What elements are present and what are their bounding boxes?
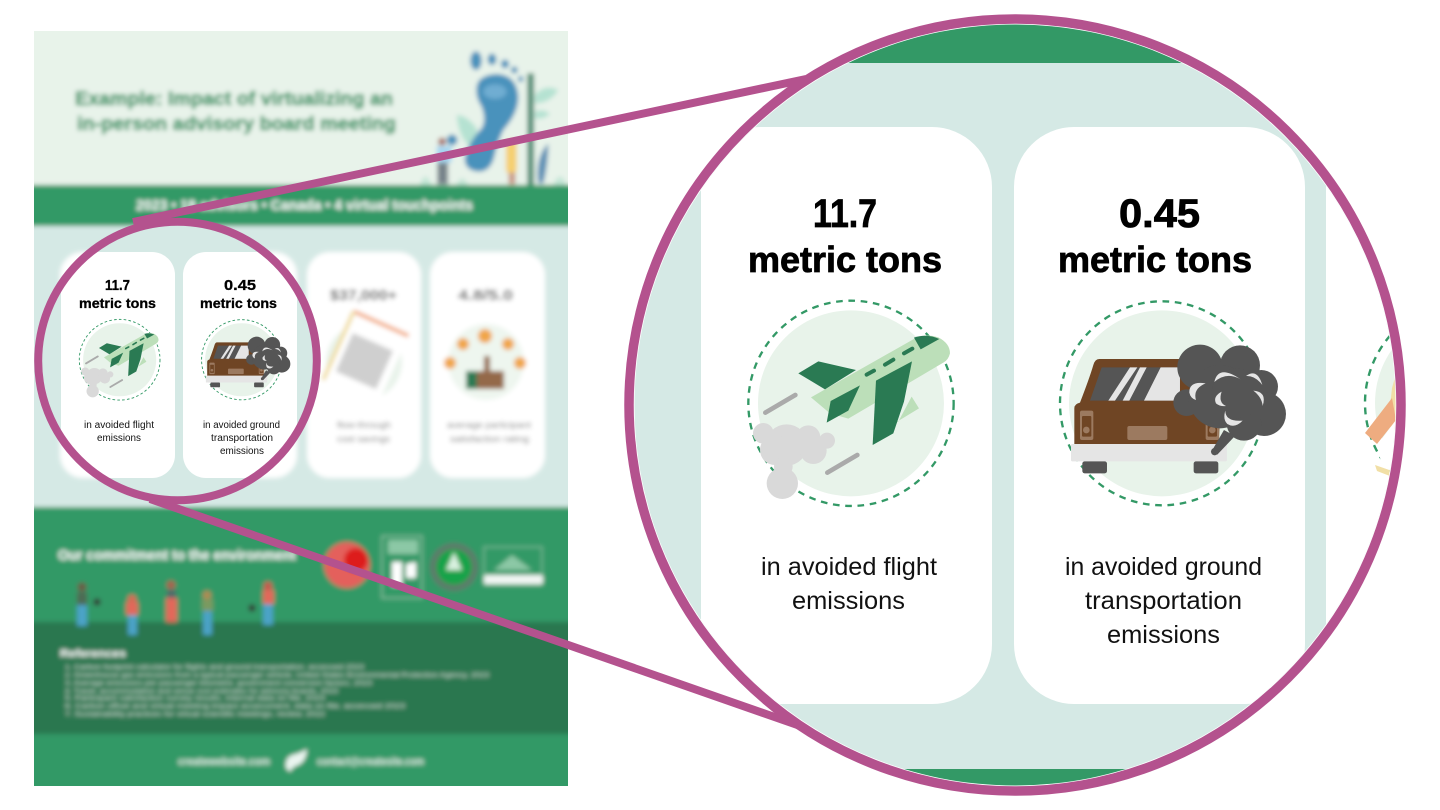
- card: satisfaction rating: satisfaction rating: [450, 434, 529, 445]
- text: in avoided ground transportation emissions: [1066, 557, 1260, 643]
- card: 0.45 metric tons avoided ground emissions: [1014, 127, 1305, 704]
- infographic poster, blurred background: [20, 20, 580, 804]
- text: in avoided ground transportation emissions: emissions: [1107, 621, 1220, 649]
- card: cost savings: flow-through: [337, 420, 391, 431]
- card: 11.7 metric tons avoided flight emissions: [701, 127, 992, 704]
- stat: 11.7 metric tons: 11.7: [813, 192, 877, 236]
- stat: 0.45 metric tons: metric tons: [1058, 239, 1252, 280]
- panel: references: 5. Participant satisfaction survey results, internal data on file, 2023: [65, 695, 326, 702]
- stat: 11.7 metric tons, small: [80, 280, 156, 308]
- text: in avoided ground transportation emissions, small: transportation: [211, 433, 273, 444]
- card: third card partially visible: [1326, 186, 1396, 624]
- title: [75, 89, 396, 135]
- panel: commitment to the environment: Our commitment to the environment: [58, 547, 296, 564]
- card: avoided ground emissions, small: [183, 252, 297, 478]
- text: in avoided ground transportation emissions: in avoided ground: [1065, 553, 1262, 581]
- text: in avoided flight emissions, small: [84, 420, 154, 441]
- stat: 11.7 metric tons: metric tons: [748, 239, 942, 280]
- text: in avoided ground transportation emissions, small: emissions: [220, 446, 264, 457]
- card: cost savings: [307, 252, 421, 478]
- stat: 0.45 metric tons, small: 0.45: [224, 277, 256, 294]
- stat: 0.45 metric tons, small: metric tons: [200, 295, 277, 311]
- card: cost savings: $37,000+: [330, 287, 397, 304]
- icon: car with exhaust smoke: [1060, 301, 1286, 505]
- stat: 11.7 metric tons, small: 11.7: [105, 277, 130, 294]
- text: in avoided ground transportation emissions, small: in avoided ground: [203, 420, 280, 431]
- stat: 11.7 metric tons: [750, 199, 941, 273]
- text: in avoided flight emissions: [762, 557, 937, 609]
- logos: environmental certifications: [324, 536, 543, 598]
- panel: references: 2. Greenhouse gas emissions from a typical passenger vehicle, United States Environmental Protection Agency, 2023: [65, 672, 489, 679]
- panel: header: [20, 20, 580, 185]
- text: in avoided flight emissions: emissions: [792, 587, 905, 615]
- connector line: bottom: [150, 499, 806, 728]
- band: meeting facts: [20, 185, 580, 226]
- cards behind the lens: [60, 252, 297, 478]
- illustration: people planting trees: [77, 580, 274, 635]
- panel: references: [20, 622, 580, 734]
- card: satisfaction rating: 4.8/5.0: [458, 287, 513, 304]
- card: cost savings: cost savings: [337, 434, 390, 445]
- icon: airplane with exhaust cloud: [748, 301, 954, 506]
- magnifier: large lens with enlarged cards: [620, 10, 1440, 800]
- text: in avoided flight emissions, small: emissions: [97, 433, 141, 444]
- panel: footer contacts: createwebsite.com: [178, 756, 270, 768]
- stat: 0.45 metric tons: 0.45: [1119, 192, 1200, 236]
- text: in avoided flight emissions: in avoided flight: [761, 553, 937, 581]
- connector line: top: [133, 79, 806, 222]
- icon: airplane, small: [79, 319, 160, 400]
- stat: 0.45 metric tons: [1060, 198, 1251, 273]
- icon: car, small: [202, 320, 290, 400]
- panel: references: 4. Travel, accommodation and venue cost estimates for advisory boards, 2023: [65, 688, 338, 695]
- illustration: carbon footprint with people: [420, 51, 567, 185]
- stat: 0.45 metric tons, small: [200, 280, 276, 308]
- panel: references: 7. Sustainability practices for virtual scientific meetings, review, 2022: [65, 711, 325, 718]
- title: Example: Impact of virtualizing an: [75, 89, 393, 110]
- panel: references: 1. Carbon footprint calculator for flights and ground transportation, accessed 2023: [65, 664, 364, 671]
- band: meeting facts: 2023 • 18 advisors • Canada • 4 virtual touchpoints: [136, 197, 473, 214]
- panel: references: 6. Carbon offset and virtual meeting impact assessment, data on file, accessed 2023: [65, 703, 406, 710]
- text: in avoided ground transportation emissions, small: [204, 420, 280, 454]
- title: in-person advisory board meeting: [77, 114, 396, 135]
- stat: 11.7 metric tons, small: metric tons: [79, 295, 156, 311]
- panel: commitment to the environment: [20, 507, 580, 622]
- card: satisfaction rating: average participant: [447, 420, 531, 431]
- text: in avoided ground transportation emissions: transportation: [1085, 587, 1242, 615]
- panel: references: References: [60, 648, 126, 660]
- text: in avoided flight emissions, small: in avoided flight: [84, 420, 154, 431]
- card: avoided flight emissions, small: [61, 252, 175, 478]
- panel: footer contacts: [34, 730, 568, 786]
- card: satisfaction rating: [430, 252, 545, 478]
- magnifier: small lens over cards: [30, 215, 330, 515]
- panel: references: 3. Average emissions per passenger kilometre, government conversion factors, 2023: [65, 680, 372, 687]
- panel: footer contacts: contact@createsite.com: [317, 756, 424, 768]
